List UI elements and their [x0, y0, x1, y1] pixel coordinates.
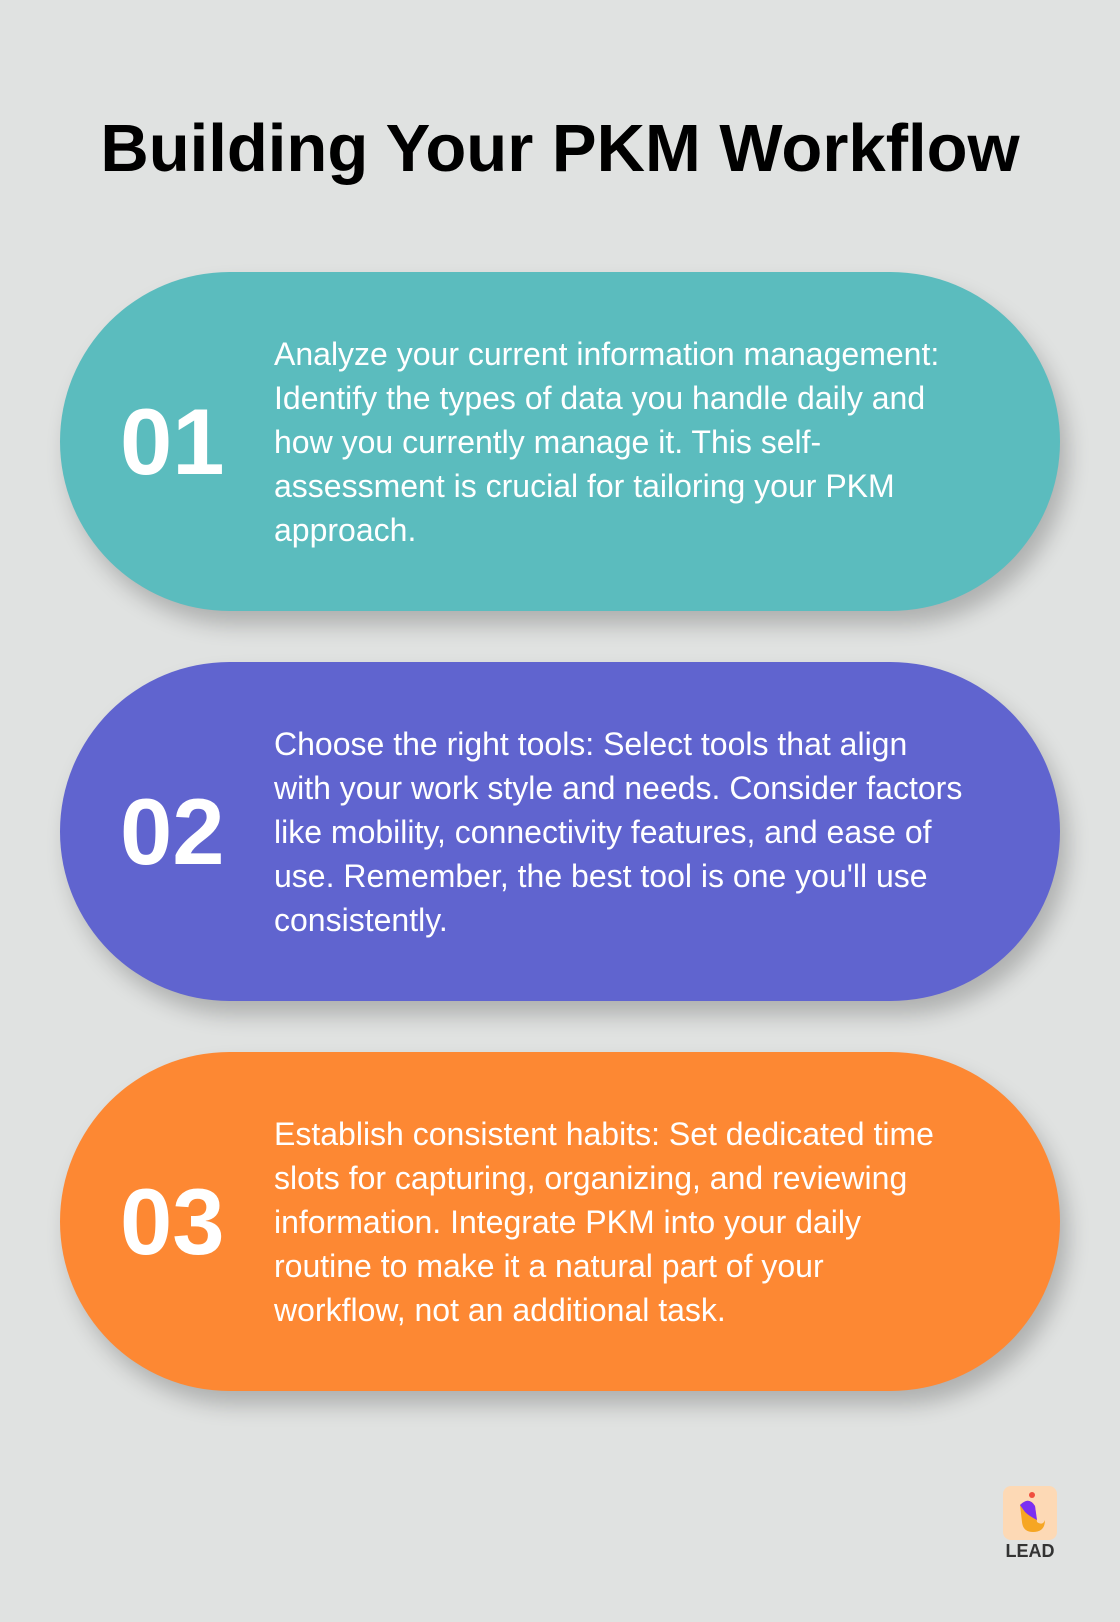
text: step 01: Analyze your current information management:	[274, 336, 939, 372]
text: step 03: information. Integrate PKM into your daily	[274, 1204, 861, 1240]
text: step 02: Choose the right tools: Select tools that align	[274, 726, 907, 762]
text: step 01: Identify the types of data you handle daily and	[274, 380, 925, 416]
text: step 01: assessment is crucial for tailoring your PKM	[274, 468, 895, 504]
text: step 02: use. Remember, the best tool is one you'll use	[274, 858, 928, 894]
panel: step 02	[60, 662, 1060, 1001]
text: step 01: how you currently manage it. This self-	[274, 424, 821, 460]
text: step 02: consistently.	[274, 902, 448, 938]
text: step 03: slots for capturing, organizing, and reviewing	[274, 1160, 907, 1196]
text: step 02: with your work style and needs. Consider factors	[274, 770, 962, 806]
number 02: 02	[120, 779, 225, 884]
logo text: LEAD	[1006, 1541, 1054, 1561]
panel: step 03	[60, 1052, 1060, 1391]
text: step 03: workflow, not an additional task.	[274, 1292, 726, 1328]
panel: step 01	[60, 272, 1060, 611]
text: step 03	[274, 1116, 934, 1328]
text: step 02	[274, 726, 962, 938]
number 03: 03	[120, 1169, 225, 1274]
icon: logo	[1003, 1486, 1057, 1540]
text: step 02: like mobility, connectivity features, and ease of	[274, 814, 932, 850]
number 01: 01	[120, 389, 225, 494]
text: step 03: routine to make it a natural part of your	[274, 1248, 824, 1284]
title: Building Your PKM Workflow	[100, 111, 1020, 186]
text: step 01	[274, 336, 939, 548]
text: step 01: approach.	[274, 512, 416, 548]
text: step 03: Establish consistent habits: Set dedicated time	[274, 1116, 934, 1152]
